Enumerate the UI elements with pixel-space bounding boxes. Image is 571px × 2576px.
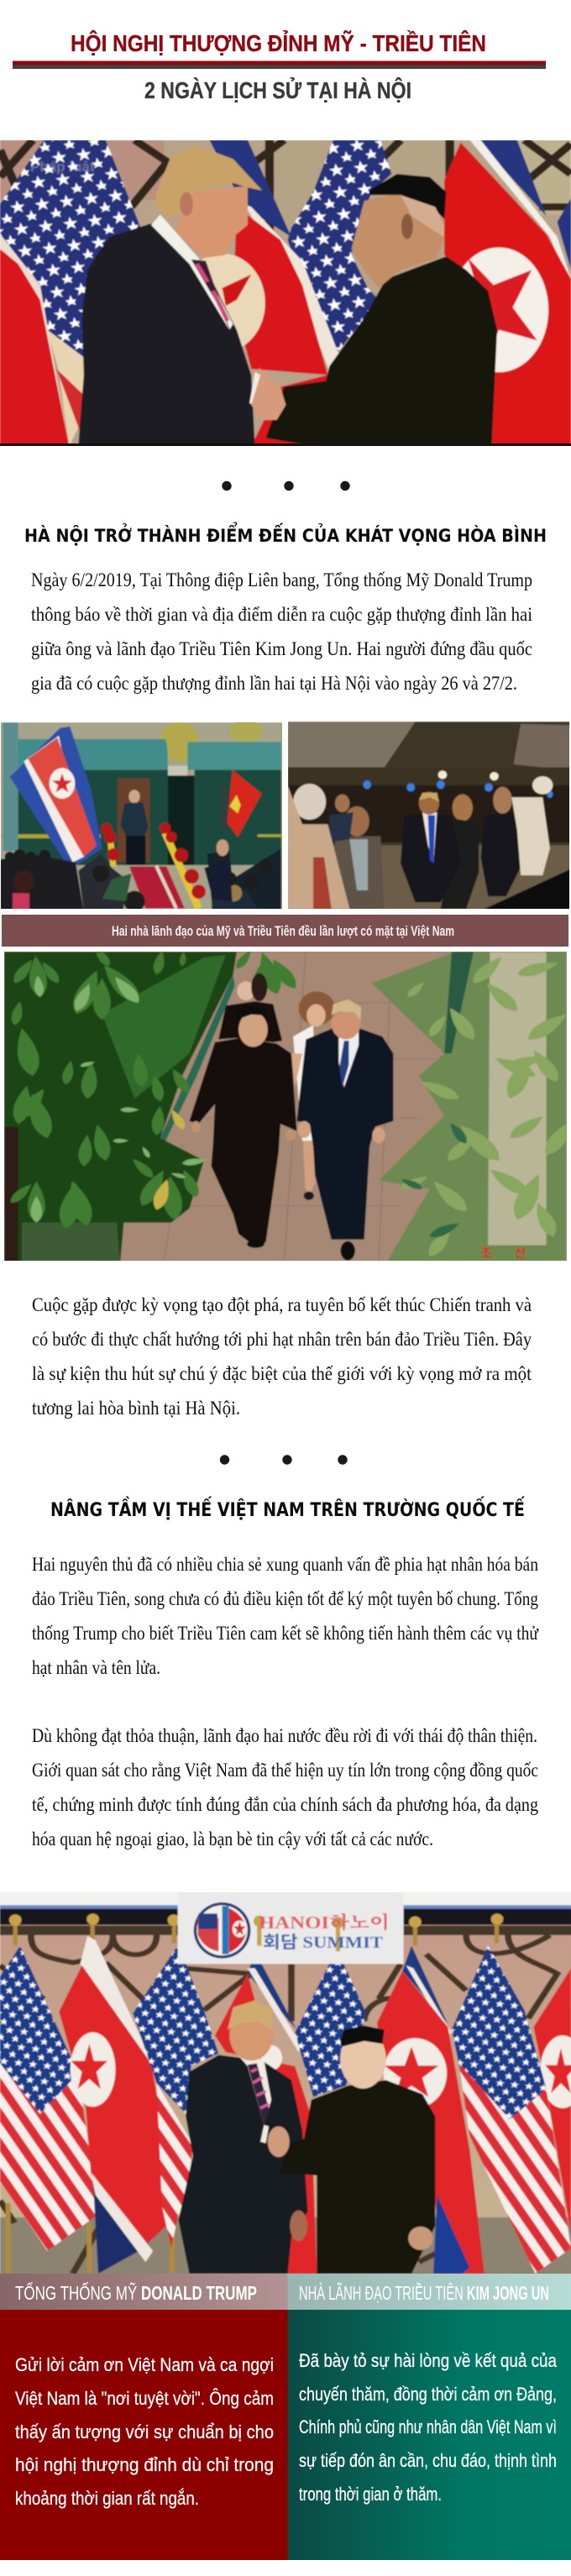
Trump body	[0, 2310, 287, 2560]
Kim body: trong thời gian ở thăm.	[299, 2484, 442, 2505]
US flag 2	[156, 2083, 193, 2248]
Kim	[190, 1038, 296, 1246]
US flag 4	[458, 2064, 571, 2274]
caption bar	[2, 915, 568, 947]
sign text	[259, 1912, 390, 1952]
photo: Trump and Kim handshake	[0, 140, 571, 448]
sign board	[178, 1890, 404, 1964]
balls	[9, 1913, 503, 1928]
paragraph: announcement	[31, 569, 532, 695]
subtitle: 2 NGÀY LỊCH SỬ TẠI HÀ NỘI	[144, 76, 411, 103]
NK flag 3	[402, 1946, 448, 2024]
Kim body	[287, 2310, 571, 2560]
Trump	[179, 2055, 307, 2274]
Trump body: Việt Nam là "nơi tuyệt vời". Ông cảm	[15, 2388, 274, 2409]
Kim header	[287, 2274, 571, 2310]
NK flag 2	[247, 1964, 297, 2029]
woman left	[218, 1001, 282, 1042]
sign text: HANOI하노이	[259, 1912, 390, 1933]
main title: HỘI NGHỊ THƯỢNG ĐỈNH MỸ - TRIỀU TIÊN	[71, 29, 486, 56]
panel: Kim Jong Un	[287, 2274, 571, 2560]
panel: Donald Trump	[0, 2274, 287, 2560]
Trump body: Gửi lời cảm ơn Việt Nam và ca ngợi	[15, 2354, 274, 2375]
photo: leaders walking in garden	[0, 946, 571, 1265]
NK flag 4	[533, 1968, 571, 2234]
paragraph: Vietnam prestige: hóa quan hệ ngoại giao, là bạn bè tin cậy với tất cả các nước.	[32, 1828, 433, 1850]
Trump body: hội nghị thượng đỉnh dù chỉ trong	[15, 2454, 274, 2475]
paragraph: Vietnam prestige	[32, 1725, 538, 1850]
Kim	[266, 256, 497, 446]
photo: leaders in front of flags	[0, 1890, 571, 2278]
Trump	[296, 1028, 393, 1240]
photo: Trump at airport	[288, 721, 571, 910]
Trump header	[0, 2274, 287, 2310]
NK flag 1	[80, 1940, 149, 2055]
US flag 1	[0, 2064, 98, 2251]
Trump body: khoảng thời gian rất ngắn.	[15, 2488, 199, 2509]
sign text: 회담 SUMMIT	[263, 1933, 384, 1952]
watermark: Pháp luật	[30, 159, 95, 175]
poles	[6, 1921, 499, 2274]
Kim	[280, 2080, 435, 2274]
woman right	[293, 1026, 317, 1141]
title block	[13, 29, 546, 103]
photo: Kim at train	[0, 720, 286, 913]
Trump body: thấy ấn tượng với sự chuẩn bị cho	[15, 2421, 274, 2442]
Trump	[78, 223, 255, 446]
paragraph: expectations: tương lai hòa bình tại Hà Nội.	[32, 1398, 240, 1419]
separator dots	[222, 481, 350, 491]
paragraph: expectations	[32, 1294, 532, 1419]
KCNA logo: 조 선	[480, 1246, 526, 1261]
separator dots	[220, 1455, 348, 1465]
paragraph: nuclear talks	[32, 1554, 539, 1679]
title rule	[13, 60, 546, 69]
right foliage	[371, 952, 566, 1263]
Trump header: TỔNG THỐNG MỸ DONALD TRUMP	[15, 2281, 257, 2304]
US flag 3	[295, 1949, 366, 2097]
paragraph: nuclear talks: hạt nhân và tên lửa.	[32, 1657, 160, 1679]
